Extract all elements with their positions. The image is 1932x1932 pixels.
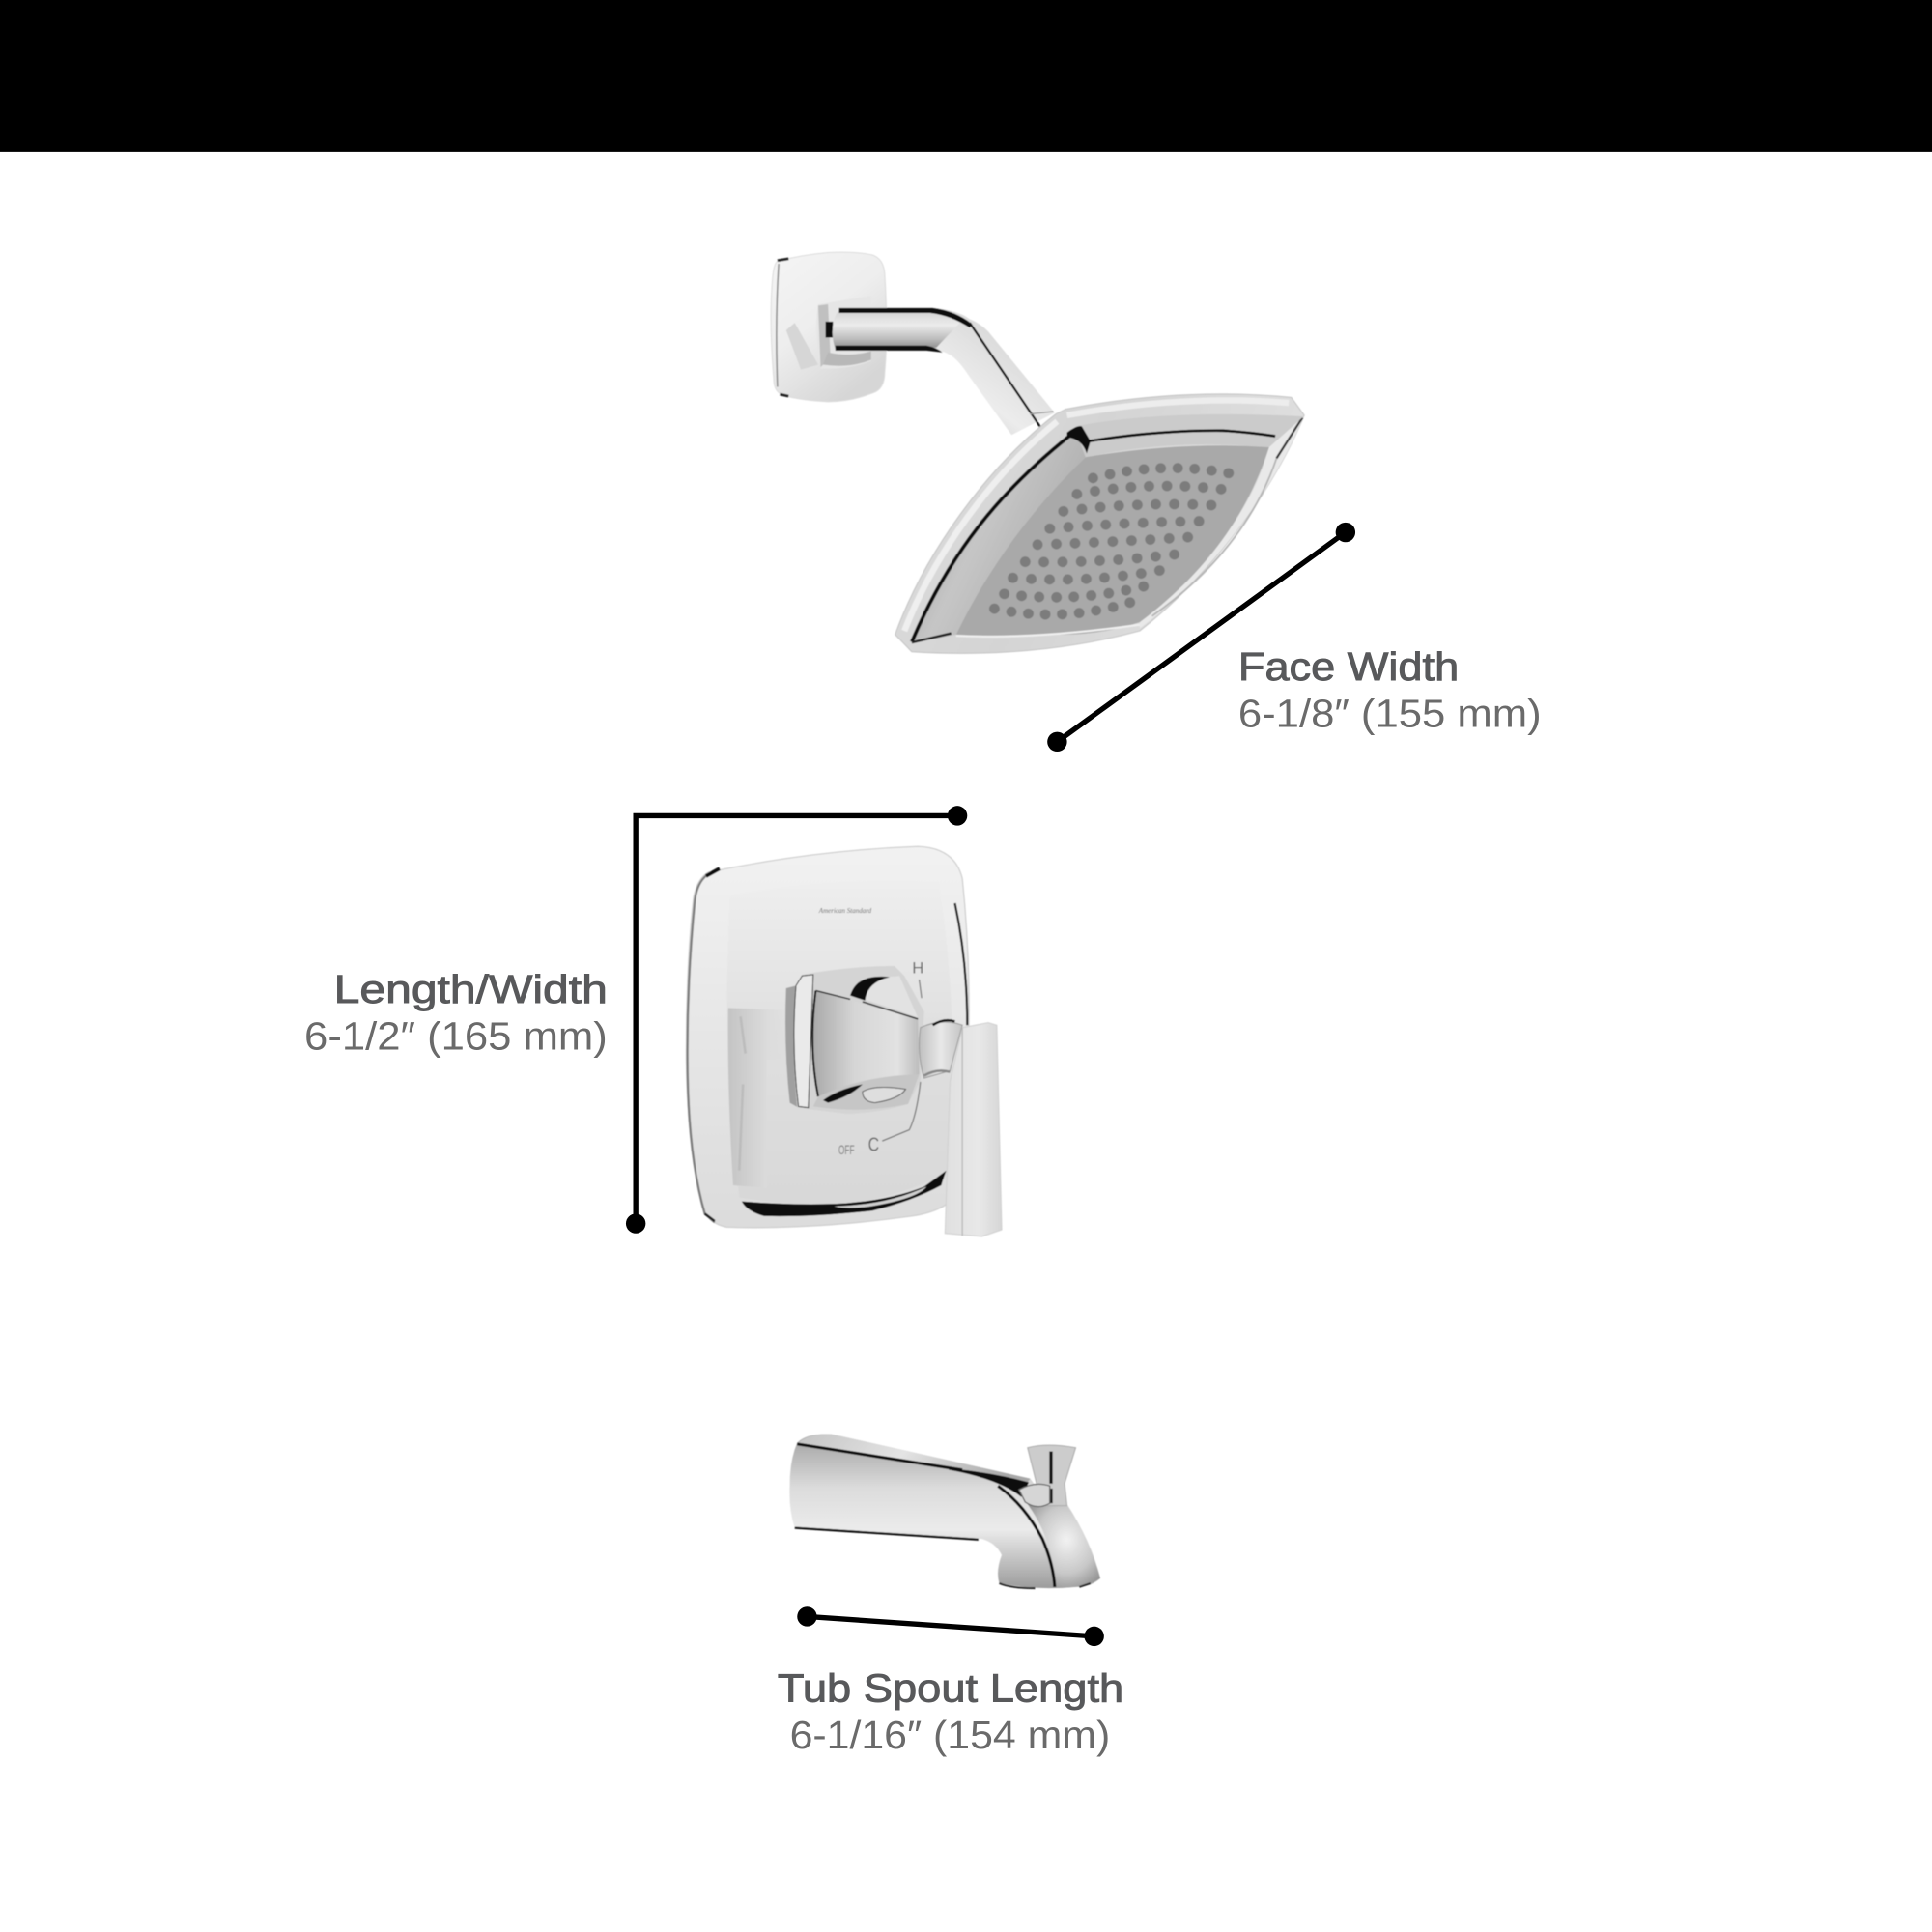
label: length and width: 6-1/2″ (165 mm) — [304, 1014, 608, 1059]
icon: wall mount escutcheon — [771, 252, 887, 402]
text: hot mark: H — [912, 959, 923, 978]
dimension bracket: length and width — [626, 806, 967, 1234]
icon: rim highlight — [1067, 400, 1289, 415]
label: face width: 6-1/8″ (155 mm) — [1238, 692, 1542, 736]
icon: right chrome band — [1140, 416, 1303, 629]
valve trim plate with handle — [686, 846, 1002, 1236]
icon: diverter knob — [1019, 1445, 1076, 1507]
icon: shower arm — [833, 308, 1055, 435]
tub spout — [789, 1435, 1100, 1588]
label: length and width: Length/Width — [334, 967, 608, 1011]
icon: spout top highlight — [797, 1435, 1030, 1493]
icon: handle base — [785, 966, 924, 1114]
icon: shower head rim — [895, 394, 1304, 653]
icon: spout body — [789, 1435, 1100, 1588]
icon: dark edge lines — [912, 435, 1070, 642]
dimension line: face width — [1047, 523, 1355, 752]
icon: left chrome strip — [912, 428, 1086, 643]
label: tub spout length — [778, 1665, 1123, 1757]
icon: spout nose — [1025, 1501, 1100, 1587]
icon: lever — [945, 1023, 1002, 1236]
icon: recessed top band — [1069, 414, 1303, 457]
text: cold mark: C — [868, 1134, 879, 1155]
label: face width — [1238, 644, 1542, 736]
shower head and arm — [771, 252, 1304, 653]
icon: raised centre face — [727, 881, 952, 1204]
icon: back plate — [686, 846, 969, 1228]
text: brand logo: American Standard — [818, 907, 872, 915]
icon: rim left highlight — [904, 421, 1057, 631]
top black banner — [0, 0, 1932, 152]
icon: spray nozzles — [994, 469, 1229, 614]
text: off mark: OFF — [838, 1142, 855, 1157]
icon: handle neck — [920, 1020, 962, 1078]
icon: left side reflection — [728, 1008, 788, 1188]
dimension line: tub spout length — [797, 1606, 1104, 1646]
icon: lower dark reflection — [742, 1171, 947, 1216]
label: face width: Face Width — [1238, 644, 1459, 689]
label: tub spout length: 6-1/16″ (154 mm) — [790, 1713, 1110, 1757]
icon: spray face — [956, 445, 1269, 636]
icon: black reflections — [797, 1444, 962, 1470]
label: length and width — [304, 967, 608, 1059]
label: tub spout length: Tub Spout Length — [778, 1665, 1123, 1710]
